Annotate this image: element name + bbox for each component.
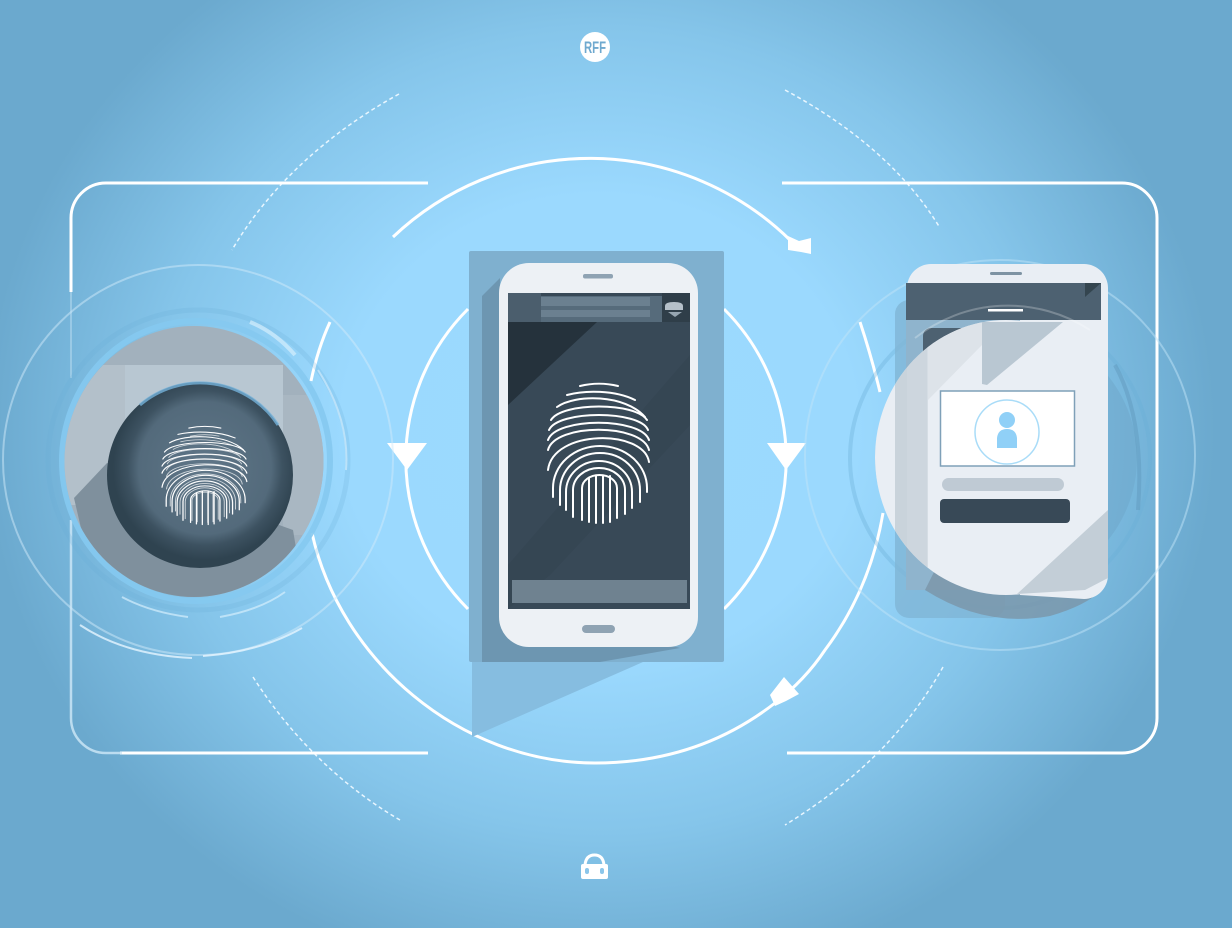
arrow: bottom right [770,677,799,706]
phone inner shadow [482,278,680,662]
icon: fingerprint [548,384,649,523]
arrow: top right [788,236,811,254]
rounded frame [71,183,1157,753]
phone body [499,263,698,647]
login card [940,391,1074,466]
dashed arcs [232,90,943,825]
login under-screen [906,320,1030,590]
phone speaker [583,274,613,278]
panel: centre phone [469,251,724,737]
login phone shadow [895,300,1005,618]
login speaker [990,272,1022,275]
screen top bar [541,296,662,322]
outer cycle circle [311,158,883,763]
icon: status [665,302,683,317]
login blue backing disc [875,327,1137,589]
sensor grey disc [64,326,324,597]
sensor fingerprint [162,426,247,525]
login phone right body [1020,320,1108,599]
login rings [805,260,1195,650]
phone backing panel [469,251,724,662]
arrow: right triangle [767,443,806,470]
screen bottom bar [512,580,687,603]
login button [940,499,1070,523]
sensor rings [3,265,393,658]
login input pill [942,478,1064,491]
icon: user avatar [975,400,1039,464]
login disc shadow [982,322,1063,385]
login overlay rings [915,306,1139,510]
panel: fingerprint sensor [3,265,393,658]
screen glare [508,322,597,405]
sensor disc detail [60,365,330,610]
login large disc [875,320,1020,595]
login status bar [906,283,1101,320]
panel: login phone [805,260,1195,650]
inner cycle circle [406,309,786,609]
sensor dark disc [107,382,293,568]
arrow: left triangle [387,443,427,470]
login dark block [923,328,983,358]
icon: RFF badge: RFF [584,38,606,57]
phone cast shadow [472,648,675,737]
phone home button [582,625,615,633]
phone screen [508,293,690,609]
icon: RFF badge [580,32,610,62]
login lower smudge [925,570,1102,619]
login phone top [907,264,1108,320]
icon: lock [581,855,608,879]
